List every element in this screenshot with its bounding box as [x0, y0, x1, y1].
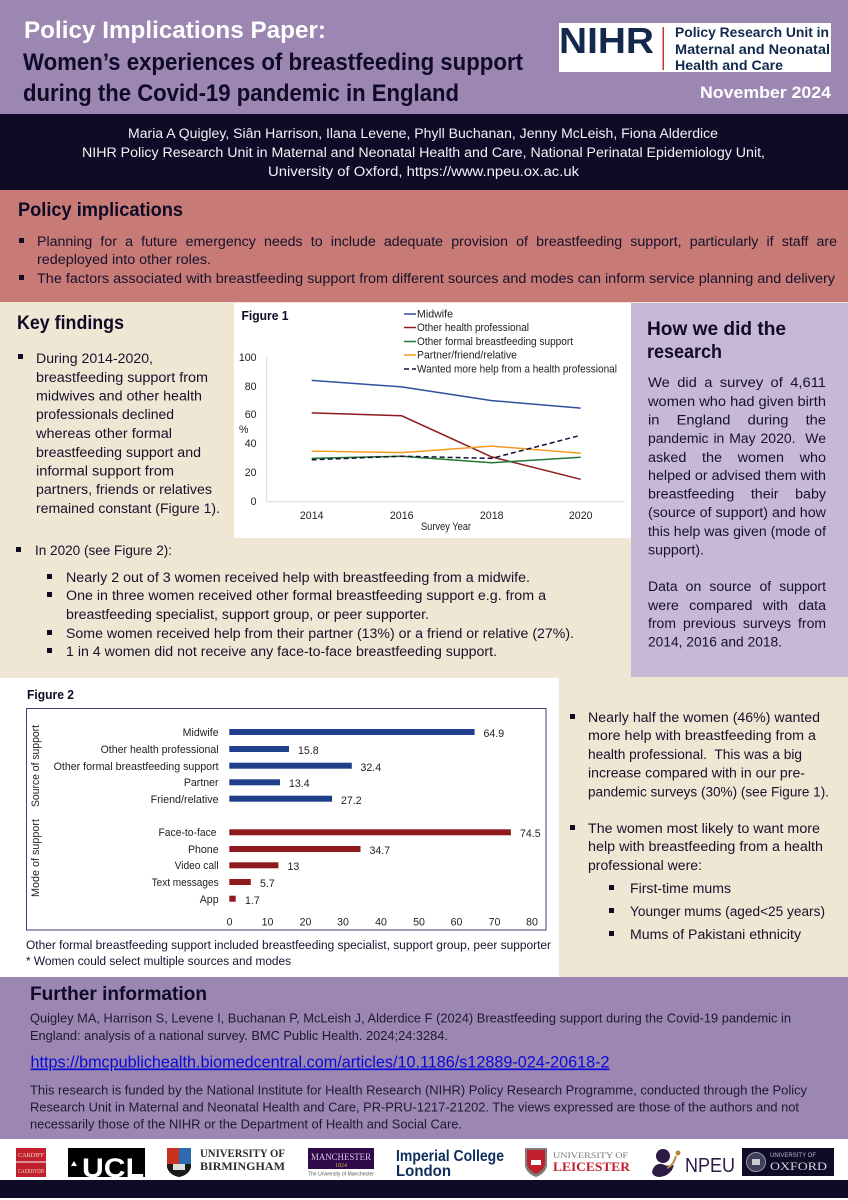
logo: Imperial College London: London	[396, 1163, 451, 1180]
text: wanted more help findings: First-time mums	[630, 881, 731, 896]
heading: how we did the research: How we did the	[647, 318, 786, 340]
logo: NIHR: Maternal and Neonatal	[675, 41, 830, 57]
x axis labels: 30	[337, 916, 349, 928]
text: method: women who had given birth	[647, 394, 826, 409]
text: key findings bullet: midwives and other health	[36, 388, 202, 404]
authors band: University of Oxford, https://www.npeu.ox.ac.uk	[268, 164, 579, 179]
logo: University of Birmingham	[167, 1146, 285, 1177]
text: method: Data on source of support	[648, 579, 826, 594]
x axis labels: 20	[300, 916, 311, 928]
text: in 2020 bullets: In 2020 (see Figure 2):	[35, 543, 172, 558]
logo: Cardiff	[16, 1148, 46, 1177]
text: key findings bullet: professionals declined	[36, 407, 174, 422]
text: citation: Quigley MA, Harrison S, Levene I, Buchanan P, McLeish J, Alderdice F (2024) Breastfeeding support during the Covid-19 pandemic in	[30, 1012, 791, 1026]
text: citation: England: analysis of a national survey. BMC Public Health. 2024;24:3284.	[30, 1029, 448, 1043]
x axis labels: 70	[489, 916, 500, 928]
text: in 2020 bullets: Some women received help from their partner (13%) or a friend or relative (27%).	[66, 626, 574, 641]
text: funding: Research Unit in Maternal and Neonatal Health and Care, PR-PRU-1217-21202. The views expressed are those of the authors and not	[30, 1100, 800, 1114]
value labels: 27.2	[341, 795, 362, 807]
bullet list: policy implications: redeployed into other roles.	[37, 252, 211, 267]
logo: University of Oxford: OXFORD	[770, 1161, 827, 1173]
chart legend: Other formal breastfeeding support	[417, 336, 573, 348]
text: method: We did a survey of 4,611	[648, 375, 826, 390]
footnotes: * Women could select multiple sources and modes	[26, 954, 291, 968]
category labels: Other formal breastfeeding support	[54, 761, 219, 773]
panel: how we did the research	[631, 303, 848, 677]
link: article url: https://bmcpublichealth.biomedcentral.com/articles/10.1186/s12889-024-20618-2	[30, 1054, 610, 1072]
text: method: were compared with data	[647, 598, 827, 613]
panel: key findings background	[0, 302, 848, 977]
text: in 2020 bullets: 1 in 4 women did not receive any face-to-face breastfeeding support.	[66, 644, 497, 659]
category labels: Face-to-face	[158, 827, 217, 839]
text: funding: This research is funded by the National Institute for Health Research (NIHR) Policy Research Programme, conducted through the Policy	[30, 1084, 808, 1098]
logo: NIHR: Health and Care	[675, 57, 783, 73]
category labels: App	[200, 894, 219, 906]
text: in 2020 bullets: Nearly 2 out of 3 women received help with breastfeeding from a midwife.	[66, 570, 530, 585]
x axis labels: 0	[227, 916, 233, 928]
logo: University of Birmingham: BIRMINGHAM	[200, 1159, 285, 1173]
value labels: 1.7	[245, 895, 260, 907]
logo: University of Manchester	[308, 1148, 374, 1178]
x axis labels: 2016	[390, 510, 414, 522]
x axis labels: 2018	[480, 510, 504, 522]
text: method: helped or advised them with	[648, 468, 826, 483]
bars: mode of support	[229, 829, 511, 902]
y axis labels: %	[239, 424, 249, 436]
bars: source of support	[229, 729, 475, 802]
category labels: Text messages	[152, 877, 219, 889]
logo: Imperial College London	[396, 1148, 504, 1180]
line: other formal support	[312, 456, 581, 463]
chart legend: Partner/friend/relative	[417, 350, 517, 362]
text: funding: necessarily those of the NIHR or the Department of Health and Social Care.	[30, 1118, 462, 1132]
category labels: Video call	[175, 860, 219, 872]
text: method: this help was given (mode of	[648, 524, 826, 539]
text: wanted more help findings: Mums of Pakistani ethnicity	[630, 927, 801, 942]
value labels	[245, 728, 541, 907]
title: Policy Implications Paper:	[24, 17, 326, 44]
x axis labels	[300, 510, 593, 533]
category labels: Friend/relative	[151, 794, 219, 806]
x axis labels: Survey Year	[421, 521, 471, 533]
value labels: 13	[288, 861, 299, 873]
x axis labels	[227, 916, 538, 928]
chart legend: Midwife	[417, 308, 453, 320]
header band	[0, 0, 848, 114]
title: Women’s experiences of breastfeeding support	[23, 49, 523, 76]
logo: University of Leicester: LEICESTER	[553, 1160, 631, 1174]
text: wanted more help findings: more help with breastfeeding from a	[588, 728, 817, 743]
logo: University of Oxford	[742, 1148, 834, 1176]
logo: NIHR: NIHR	[559, 20, 654, 61]
chart legend: Other health professional	[417, 322, 529, 334]
logo: NIHR	[559, 20, 831, 73]
line: wanted more help	[312, 435, 581, 460]
text: method: in England during the	[648, 412, 826, 428]
axis group labels	[30, 725, 42, 897]
heading: policy implications: Policy implications	[18, 200, 183, 221]
text: wanted more help findings: Nearly half the women (46%) wanted	[588, 710, 820, 725]
text: method: asked the women who	[648, 450, 826, 465]
x axis labels: 10	[262, 916, 273, 928]
authors band: Maria A Quigley, Siân Harrison, Ilana Levene, Phyll Buchanan, Jenny McLeish, Fiona Alderdice	[128, 126, 718, 141]
value labels: 5.7	[260, 878, 275, 890]
logo: Imperial College London: Imperial College	[396, 1148, 504, 1165]
logo: Cardiff: CAERDYDD	[18, 1169, 45, 1175]
figure 2 heading: Figure 2	[27, 688, 74, 702]
line: other health professional	[312, 413, 581, 479]
text: wanted more help findings: Younger mums (aged<25 years)	[630, 904, 825, 919]
bullet list: policy implications: Planning for a future emergency needs to include adequate provision of breastfeeding support, particularly if staff are	[37, 234, 837, 249]
chart axes	[267, 357, 625, 502]
chart frame	[26, 708, 546, 930]
logo: University of Leicester: UNIVERSITY OF	[553, 1150, 628, 1160]
line: partner friend relative	[312, 446, 581, 453]
logo: University of Manchester: MANCHESTER	[311, 1152, 371, 1162]
text: method: (source of support) and how	[648, 505, 826, 520]
x axis labels: 2020	[569, 510, 593, 522]
logo: University of Birmingham: UNIVERSITY OF	[200, 1146, 285, 1160]
bullet list: policy implications	[19, 234, 837, 286]
title: during the Covid-19 pandemic in England	[23, 80, 459, 107]
y axis labels: 100	[239, 352, 257, 364]
text: wanted more help findings: The women most likely to want more	[588, 821, 820, 836]
value labels: 13.4	[289, 778, 310, 790]
figure 1: line chart	[234, 303, 631, 538]
axis group labels: Mode of support	[30, 819, 42, 897]
logo: NPEU: NPEU	[685, 1155, 735, 1177]
value labels: 64.9	[484, 728, 504, 740]
figure 2: bar chart	[0, 678, 559, 977]
text: citation	[30, 1012, 791, 1043]
logo: NIHR: Policy Research Unit in	[675, 24, 829, 40]
footnotes: Other formal breastfeeding support included breastfeeding specialist, support group, peer supporter	[26, 938, 551, 952]
text: wanted more help findings	[570, 710, 829, 942]
y axis labels: 40	[245, 438, 257, 450]
logo: UCL: UCL	[82, 1153, 144, 1183]
text: key findings bullet: informal support from	[36, 464, 174, 478]
figure 1 heading: Figure 1	[242, 309, 289, 323]
text: method: pandemic in May 2020. We	[648, 431, 826, 446]
text: wanted more help findings: health professional. This was a big	[588, 747, 802, 762]
value labels: 32.4	[360, 762, 381, 774]
text: in 2020 bullets: One in three women received other formal breastfeeding support e.g. from a	[66, 588, 547, 603]
y axis labels: 20	[245, 467, 257, 479]
line: midwife	[312, 380, 581, 408]
text: in 2020 bullets	[16, 543, 574, 659]
panel: key findings	[16, 313, 574, 659]
logo: University of Oxford: UNIVERSITY OF	[770, 1153, 816, 1159]
category labels: Midwife	[183, 727, 219, 739]
text: method	[647, 375, 827, 650]
logo: Cardiff: CARDIFF	[18, 1153, 45, 1159]
y axis labels	[239, 352, 257, 508]
category labels: Partner	[184, 777, 219, 789]
text: key findings bullet: breastfeeding support and	[36, 445, 201, 460]
logo strip	[16, 1146, 834, 1183]
bullet list: policy implications: The factors associated with breastfeeding support from different sources and modes can inform service planning and delivery	[37, 271, 835, 286]
panel: policy implications	[0, 190, 848, 302]
text: key findings bullet: breastfeeding support from	[36, 370, 208, 385]
category labels	[54, 727, 219, 906]
text: key findings bullet	[18, 351, 220, 516]
category labels: Phone	[188, 844, 219, 856]
text: in 2020 bullets: breastfeeding specialist, support group, or peer supporter.	[66, 607, 429, 622]
text: method: support).	[648, 542, 704, 558]
x axis labels: 80	[526, 916, 538, 928]
text: funding	[30, 1084, 808, 1132]
text: wanted more help findings: increase compared with in our pre-	[588, 766, 805, 780]
text: key findings bullet: remained constant (Figure 1).	[36, 501, 220, 516]
x axis labels: 50	[413, 916, 425, 928]
y axis labels: 0	[251, 496, 257, 508]
value labels: 15.8	[298, 745, 319, 757]
heading: key findings: Key findings	[17, 313, 124, 334]
text: wanted more help findings: help with breastfeeding from a health	[588, 839, 823, 854]
footer band	[0, 1180, 848, 1198]
text: key findings bullet: whereas other formal	[35, 426, 172, 441]
axis group labels: Source of support	[30, 725, 42, 807]
text: wanted more help findings: professional were:	[588, 858, 702, 873]
chart legend	[404, 308, 617, 376]
logo: UCL	[68, 1148, 145, 1183]
text: wanted more help findings: pandemic surveys (30%) (see Figure 1).	[588, 784, 829, 800]
value labels: 34.7	[370, 845, 390, 857]
authors band: NIHR Policy Research Unit in Maternal and Neonatal Health and Care, National Perinatal Epidemiology Unit,	[82, 145, 765, 160]
panel: further information	[0, 977, 848, 1139]
heading: how we did the research	[647, 318, 786, 363]
title	[23, 17, 523, 107]
y axis labels: 80	[245, 381, 257, 393]
text: method: breastfeeding their baby	[648, 486, 826, 502]
text: key findings bullet: During 2014-2020,	[36, 351, 153, 366]
category labels: Other health professional	[101, 744, 219, 756]
x axis labels: 60	[451, 916, 462, 928]
x axis labels: 40	[375, 916, 387, 928]
date: November 2024	[700, 84, 832, 102]
logo: University of Manchester: 1824	[335, 1163, 347, 1169]
heading: further information: Further information	[30, 983, 207, 1005]
footnotes	[26, 938, 551, 968]
text: method: from previous surveys from	[648, 616, 826, 631]
logo: NPEU	[652, 1149, 735, 1177]
chart legend: Wanted more help from a health professional	[417, 364, 617, 376]
authors band	[0, 114, 848, 190]
text: key findings bullet: partners, friends or relatives	[36, 482, 212, 497]
text: method: 2014, 2016 and 2018.	[648, 634, 782, 650]
value labels: 74.5	[520, 828, 541, 840]
y axis labels: 60	[245, 409, 257, 421]
x axis labels: 2014	[300, 510, 324, 522]
logo: University of Manchester: The University of Manchester	[308, 1172, 374, 1178]
logo: University of Leicester	[525, 1148, 631, 1177]
heading: how we did the research: research	[647, 341, 722, 363]
